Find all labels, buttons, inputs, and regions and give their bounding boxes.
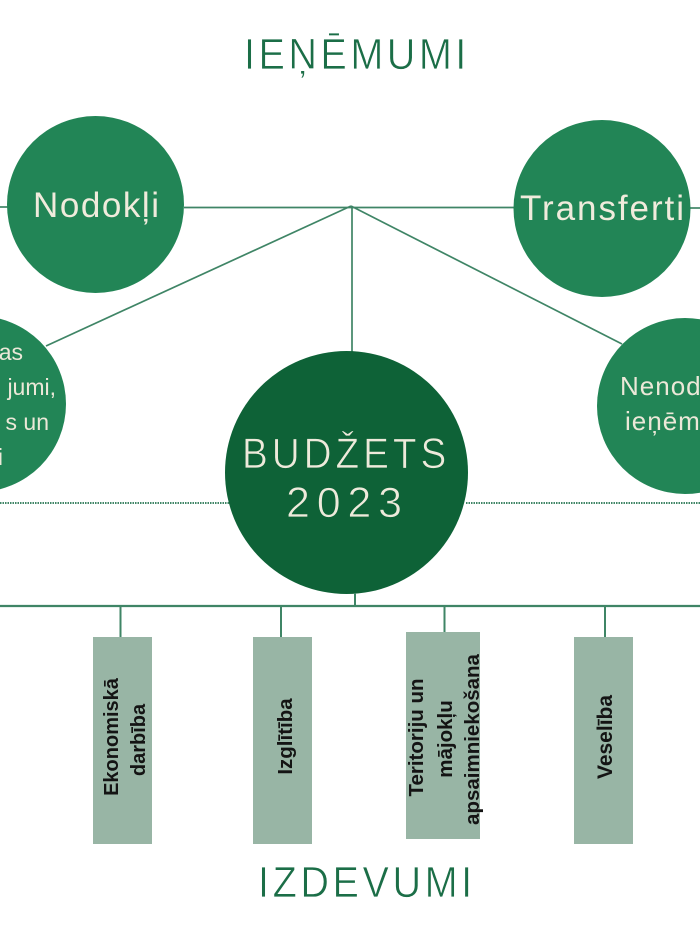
expense box: Teritoriju un mājokļu apsaimniekošana: mājokļu	[434, 700, 457, 778]
expense box: Veselība	[574, 637, 633, 844]
heading: expenses: IZDEVUMI	[258, 857, 472, 906]
expense box: Ekonomiskā darbība	[93, 637, 152, 844]
heading: revenue: IEŅĒMUMI	[244, 29, 466, 78]
circle: left revenue source, cropped by the page edge	[0, 316, 66, 492]
circle: Transferti	[514, 120, 690, 297]
connector lines: budget to expenses	[0, 593, 700, 637]
circle: Budžets 2023: BUDŽETS	[242, 429, 446, 477]
expense box: Ekonomiskā darbība: darbība	[128, 703, 150, 776]
circle: Nodokļi	[7, 116, 184, 293]
expense box: Izglītība	[253, 637, 312, 844]
circle: Transferti: Transferti	[520, 189, 684, 228]
circle: left revenue source, cropped by the page edge: jumi,	[6, 374, 56, 400]
circle: left revenue source, cropped by the page edge: s un	[6, 409, 49, 435]
expense box: Teritoriju un mājokļu apsaimniekošana: Teritoriju un	[405, 678, 428, 797]
expense box: Teritoriju un mājokļu apsaimniekošana	[405, 632, 484, 839]
circle: Budžets 2023: 2023	[286, 479, 402, 527]
expense box: Teritoriju un mājokļu apsaimniekošana: apsaimniekošana	[461, 653, 484, 825]
expense box: Izglītība: Izglītība	[274, 698, 297, 775]
expense box: Veselība: Veselība	[594, 695, 617, 779]
expense box: Ekonomiskā darbība: Ekonomiskā	[101, 677, 123, 796]
circle: Budžets 2023	[225, 351, 468, 594]
dotted divider	[0, 502, 700, 504]
circle: Nenodokļu ieņēmumi, cropped by the page edge	[597, 318, 700, 494]
circle: Nodokļi: Nodokļi	[33, 186, 159, 225]
connector lines: revenue to budget	[0, 206, 700, 352]
